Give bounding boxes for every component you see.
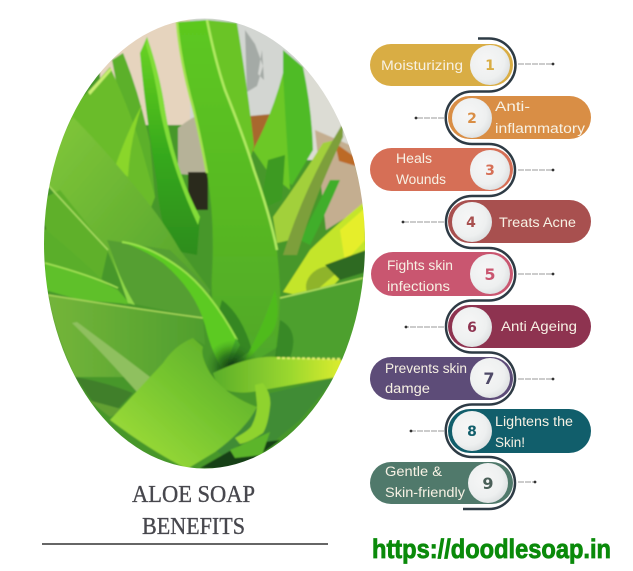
benefit 8 <box>410 409 591 453</box>
benefit 1: 1 <box>485 58 495 74</box>
curling foreground leaves <box>213 357 342 393</box>
benefit 9: 9 <box>482 474 494 493</box>
back leaves <box>208 19 255 156</box>
benefit 5: infections <box>387 279 450 294</box>
aloe vera photo in oval <box>40 15 370 475</box>
title: BENEFITS <box>142 514 245 540</box>
benefit 9 <box>370 462 536 504</box>
title <box>132 482 255 540</box>
benefit 9: Skin-friendly <box>385 485 465 500</box>
serpentine line <box>446 38 516 509</box>
benefit 1 <box>370 44 554 86</box>
benefit 8: 8 <box>467 424 477 440</box>
benefit 2: 2 <box>467 111 477 127</box>
benefits list <box>370 38 591 509</box>
lower leaves <box>48 295 205 377</box>
left front leaves <box>50 118 204 283</box>
benefit 9: Gentle & <box>385 464 442 479</box>
benefit 7: Prevents skin <box>385 361 467 376</box>
benefit 3: Wounds <box>396 172 446 187</box>
benefit 3 <box>370 148 554 191</box>
benefit 3: Heals <box>396 151 432 166</box>
benefit 1: Moisturizing <box>381 58 463 73</box>
benefit 2: inflammatory <box>495 121 585 136</box>
central big leaf <box>177 20 281 370</box>
benefit 4: Treats Acne <box>499 215 576 230</box>
benefit 7: 7 <box>483 369 495 388</box>
benefit 8: Lightens the <box>495 414 573 429</box>
benefit 4 <box>402 200 591 243</box>
benefit 3: 3 <box>485 163 495 179</box>
benefit 5: Fights skin <box>387 258 453 273</box>
benefit 6: 6 <box>467 320 477 336</box>
benefit 8: Skin! <box>495 435 525 450</box>
benefit 7 <box>370 357 554 400</box>
benefit 2: Anti- <box>495 99 530 114</box>
title: ALOE SOAP <box>132 482 255 508</box>
benefit 7: damge <box>385 381 430 396</box>
benefit 5 <box>371 252 554 296</box>
benefit 5: 5 <box>484 265 496 284</box>
benefit 6 <box>405 305 591 348</box>
benefit 2 <box>415 96 591 139</box>
benefit 4: 4 <box>466 215 476 231</box>
benefit 6: Anti Ageing <box>501 319 577 334</box>
